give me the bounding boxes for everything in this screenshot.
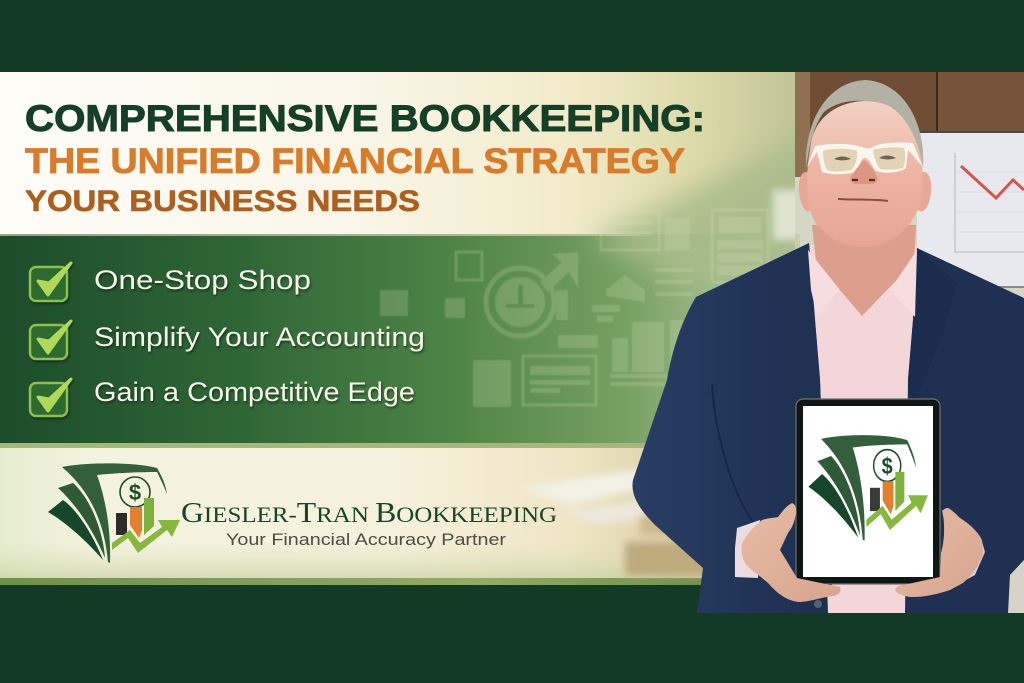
shirt xyxy=(806,245,918,613)
logo: money and chart mark: $ xyxy=(129,480,141,505)
panel: title background xyxy=(0,72,795,234)
tablet screen xyxy=(803,406,933,577)
item: gain a competitive edge xyxy=(30,377,415,416)
item: one-stop shop: One-Stop Shop xyxy=(94,265,311,295)
title line 2: THE UNIFIED FINANCIAL STRATEGY xyxy=(25,142,685,181)
bottom band xyxy=(0,585,1024,683)
panel: logo strip xyxy=(0,443,800,585)
soft blend between title and checklist xyxy=(590,136,795,290)
logo: money and chart mark xyxy=(48,463,180,563)
icon: calculator top xyxy=(712,210,768,282)
checklist xyxy=(30,263,425,416)
button xyxy=(814,600,822,608)
icon: calculator lower xyxy=(473,360,511,407)
jacket xyxy=(632,243,828,613)
ears xyxy=(799,172,931,211)
item: one-stop shop xyxy=(30,263,311,301)
right cuff xyxy=(962,538,985,582)
item: gain a competitive edge: Gain a Competitive Edge xyxy=(94,377,415,407)
hair xyxy=(806,80,923,168)
infographic banner xyxy=(0,72,1024,613)
face xyxy=(807,101,923,247)
left lapel xyxy=(767,243,832,585)
left hand xyxy=(741,503,841,602)
nose xyxy=(850,160,878,184)
right hand xyxy=(895,508,983,597)
neck xyxy=(812,225,916,316)
icon: growth arrow xyxy=(540,252,578,320)
shirt collar xyxy=(808,250,917,317)
mouth xyxy=(838,199,888,201)
arm fold xyxy=(712,385,753,522)
title line 1: COMPREHENSIVE BOOKKEEPING: xyxy=(25,98,705,139)
faint finance icons xyxy=(380,210,768,407)
icon: pyramid and list xyxy=(592,268,693,322)
icon: keyboard document xyxy=(523,335,598,405)
item: simplify your accounting: Simplify Your Accounting xyxy=(94,322,425,352)
wall monitor with red line chart xyxy=(917,131,1024,288)
top band xyxy=(0,0,1024,72)
item: simplify your accounting xyxy=(30,321,425,359)
brand name: GIESLER- TRAN BOOKKEEPING xyxy=(181,498,557,529)
logo on tablet xyxy=(808,435,928,541)
office background xyxy=(780,72,1024,613)
tablet xyxy=(796,399,940,584)
blurred desk and papers xyxy=(520,462,710,576)
eyes xyxy=(834,156,896,160)
jacket right side xyxy=(905,248,1024,613)
logo on tablet: $ xyxy=(882,452,893,479)
title xyxy=(25,98,705,218)
glasses xyxy=(807,142,923,174)
nostrils xyxy=(852,179,875,181)
title line 3: YOUR BUSINESS NEEDS xyxy=(25,185,420,218)
panel: checklist background xyxy=(0,234,800,445)
right lapel xyxy=(908,248,957,410)
left cuff xyxy=(735,520,760,578)
person xyxy=(632,80,1024,613)
icon: clock xyxy=(486,268,554,336)
icon: document top xyxy=(601,212,690,250)
tagline: Your Financial Accuracy Partner xyxy=(226,530,506,549)
icon: small ledger xyxy=(380,252,482,318)
icon: bar chart xyxy=(610,320,692,386)
